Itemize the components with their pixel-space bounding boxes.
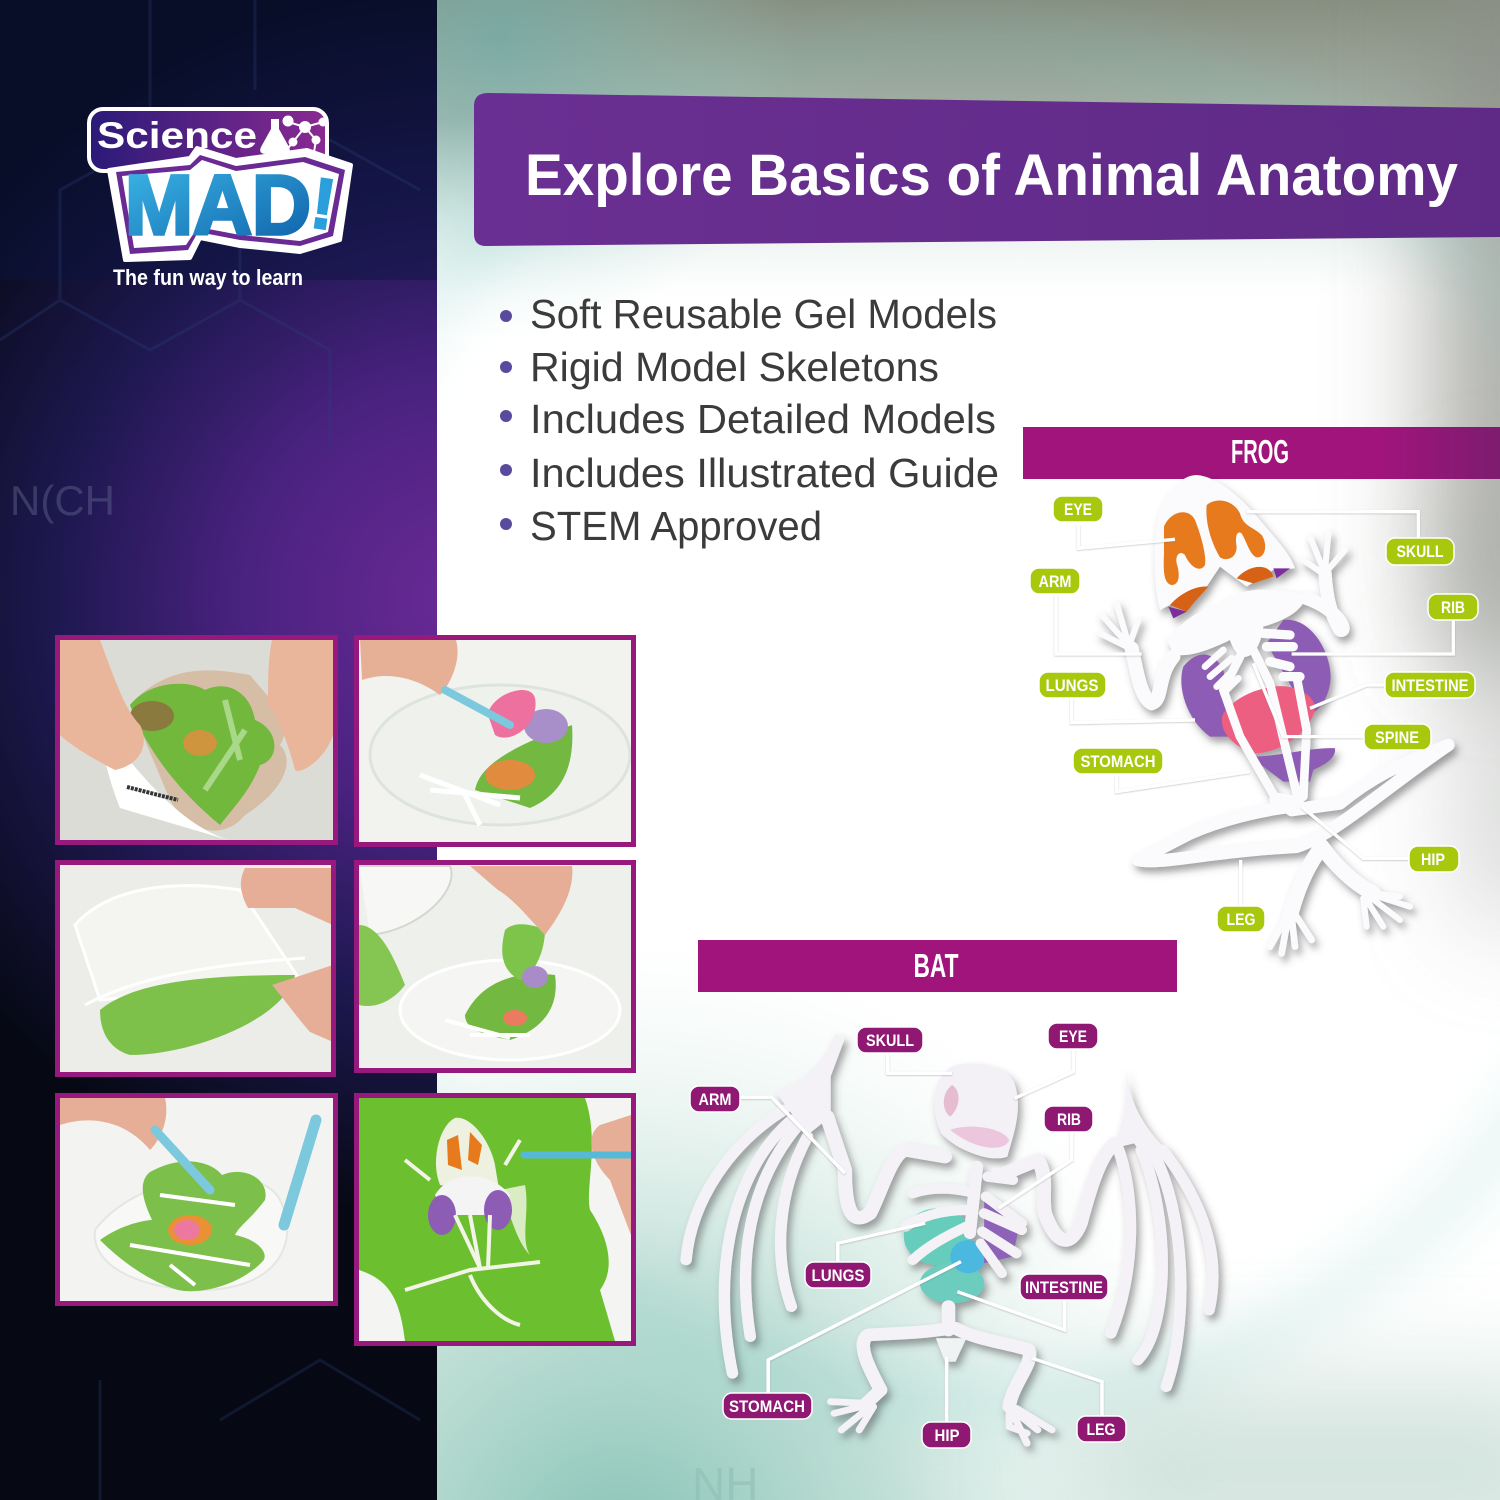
frog organs bbox=[1181, 620, 1335, 782]
frog shoulders and skull bbox=[1154, 475, 1307, 657]
photo 2: lifting organ with tool bbox=[356, 638, 634, 844]
title banner bbox=[474, 93, 1500, 246]
frog labels: HIP bbox=[1421, 850, 1445, 869]
bat labels: LEG bbox=[1086, 1420, 1116, 1439]
bat labels: INTESTINE bbox=[1025, 1278, 1103, 1297]
photo 3: opening mould bbox=[58, 862, 334, 1074]
bullet list: STEM Approved bbox=[530, 503, 822, 549]
frog labels bbox=[1030, 496, 1478, 932]
frog labels: INTESTINE bbox=[1392, 676, 1468, 695]
frog labels: STOMACH bbox=[1080, 752, 1156, 771]
left dark panel: N(CH bbox=[10, 477, 115, 524]
bat bones bbox=[686, 1110, 1213, 1443]
bat skeleton model bbox=[686, 1033, 1213, 1443]
photo 4: pulling gel away bbox=[356, 862, 634, 1070]
left dark panel bbox=[0, 0, 437, 1500]
frog labels: ARM bbox=[1038, 572, 1072, 591]
logo: Science MAD! bbox=[89, 109, 351, 290]
photo 6: frog skeleton in green slime bbox=[356, 1096, 634, 1344]
logo word: MAD!: MAD bbox=[125, 158, 311, 252]
logo: Science MAD!: ! bbox=[306, 163, 341, 246]
photo 5: gel frog on tray with tools bbox=[58, 1096, 336, 1304]
bat labels: STOMACH bbox=[729, 1397, 805, 1416]
bat labels: LUNGS bbox=[812, 1266, 864, 1285]
bat labels bbox=[690, 1023, 1126, 1448]
panel: bat heading: BAT bbox=[914, 947, 958, 984]
bullet list: Includes Detailed Models bbox=[530, 396, 996, 442]
bat labels: HIP bbox=[934, 1426, 960, 1445]
icon: flask and molecule bbox=[260, 116, 326, 154]
bullet list bbox=[500, 291, 999, 549]
frog labels: EYE bbox=[1064, 500, 1092, 519]
frog labels: LEG bbox=[1226, 910, 1256, 929]
panel: frog heading: FROG bbox=[1231, 433, 1289, 470]
bullet list: Rigid Model Skeletons bbox=[530, 344, 939, 390]
frog skeleton model bbox=[1100, 475, 1448, 953]
panel: bat heading bbox=[698, 940, 1177, 992]
bat connector lines bbox=[740, 1049, 1102, 1422]
bat organs bbox=[904, 1193, 1020, 1303]
bat labels: RIB bbox=[1057, 1110, 1081, 1129]
tagline: The fun way to learn bbox=[113, 265, 303, 290]
frog bones bbox=[1100, 533, 1448, 953]
bullet list: Includes Illustrated Guide bbox=[530, 450, 999, 496]
title text: Explore Basics of Animal Anatomy bbox=[525, 143, 1458, 208]
frog labels: LUNGS bbox=[1046, 676, 1098, 695]
frog labels: RIB bbox=[1441, 598, 1465, 617]
bat hands bbox=[775, 1033, 1168, 1153]
photo 1: peeling sheet from gel bbox=[58, 638, 336, 842]
bat labels: SKULL bbox=[866, 1031, 914, 1050]
frog labels: SPINE bbox=[1375, 728, 1419, 747]
bat labels: ARM bbox=[698, 1090, 732, 1109]
frog connector lines bbox=[1056, 512, 1453, 907]
bat labels: EYE bbox=[1059, 1027, 1087, 1046]
logo word: Science: Science bbox=[97, 115, 257, 156]
panel: frog heading bbox=[1023, 427, 1500, 479]
frog labels: SKULL bbox=[1396, 542, 1444, 561]
bullet list: Soft Reusable Gel Models bbox=[530, 291, 997, 337]
bat skull bbox=[934, 1063, 1018, 1362]
frog eyes bbox=[1164, 500, 1290, 618]
